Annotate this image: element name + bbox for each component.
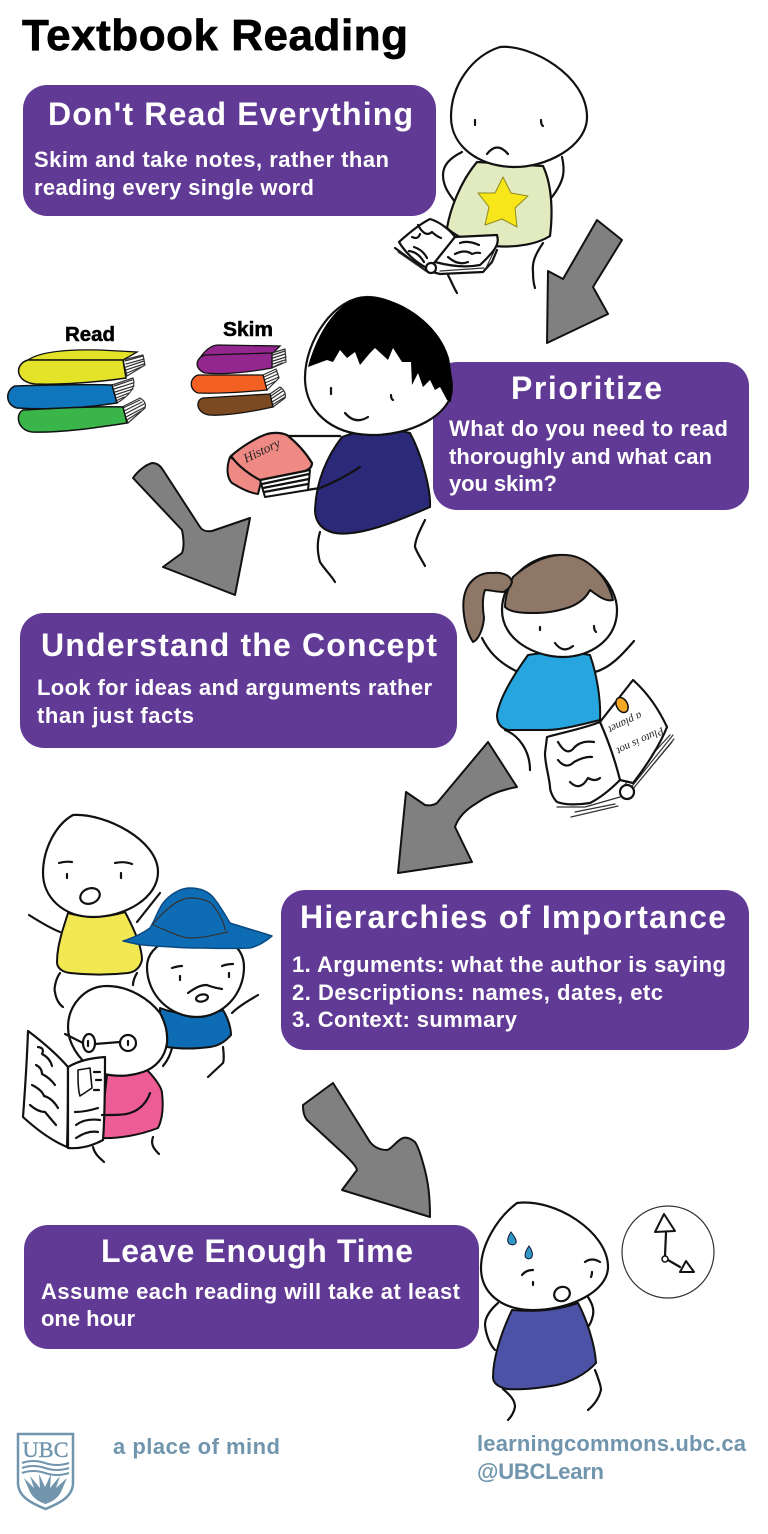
character: boy with black hair <box>228 297 452 582</box>
character: yellow shirt <box>29 815 160 1007</box>
heading: Hierarchies of Importance <box>300 899 726 935</box>
heading: Leave Enough Time <box>101 1233 413 1269</box>
website and handle: @UBCLearn <box>477 1459 604 1484</box>
tagline: a place of mind <box>113 1434 280 1459</box>
history book <box>228 433 312 497</box>
open book: Pluto is not <box>614 724 667 757</box>
book stack: skim <box>191 345 286 415</box>
group of three characters <box>23 815 272 1162</box>
panel: don't read everything <box>23 85 436 216</box>
open book: a planet <box>605 709 644 736</box>
heading: Prioritize <box>511 370 662 406</box>
list: 1. Arguments: what the author is saying <box>292 952 726 977</box>
open book <box>395 219 498 274</box>
head <box>481 1203 608 1310</box>
heading: Don't Read Everything <box>48 96 413 132</box>
panel: understand the concept <box>20 613 457 748</box>
label: skim: Skim <box>223 319 273 341</box>
website and handle <box>477 1431 747 1484</box>
list: 2. Descriptions: names, dates, etc <box>292 980 663 1005</box>
star <box>478 177 528 227</box>
text block: Look for ideas and arguments rather <box>37 675 432 700</box>
sweat drops <box>508 1232 532 1259</box>
list: 3. Context: summary <box>292 1007 518 1032</box>
character: blue hat <box>123 888 272 1077</box>
arrow <box>133 463 250 595</box>
text block <box>41 1279 461 1331</box>
head <box>451 47 587 167</box>
shirt <box>447 162 552 246</box>
text block <box>449 416 728 496</box>
text block: one hour <box>41 1306 135 1331</box>
head <box>305 297 452 435</box>
icon: clock <box>622 1206 714 1298</box>
open book <box>23 1031 105 1148</box>
list <box>292 952 726 1032</box>
history book: History <box>240 435 283 466</box>
text block: reading every single word <box>34 175 314 200</box>
hair <box>308 297 452 402</box>
open book <box>545 680 674 817</box>
character: worried with sweat drops <box>481 1203 608 1420</box>
character: pink shirt with glasses <box>23 986 167 1162</box>
text block: thoroughly and what can <box>449 444 712 469</box>
character: girl with ponytail and book <box>463 555 674 817</box>
text block: Assume each reading will take at least <box>41 1279 461 1304</box>
heading: Understand the Concept <box>41 627 437 663</box>
text block: What do you need to read <box>449 416 728 441</box>
shirt <box>315 430 430 534</box>
arrow <box>398 742 517 873</box>
head <box>502 555 617 657</box>
shirt <box>497 653 600 730</box>
panel: prioritize <box>433 362 749 510</box>
text block: Skim and take notes, rather than <box>34 147 389 172</box>
logo: UBC crest <box>18 1434 73 1509</box>
character: sad reader with star shirt <box>395 47 587 293</box>
panel: leave enough time <box>24 1225 479 1349</box>
text block: than just facts <box>37 703 194 728</box>
text block <box>34 147 389 200</box>
panel: hierarchies of importance <box>281 890 749 1050</box>
logo: UBC crest: UBC <box>22 1437 68 1462</box>
text block: you skim? <box>449 471 557 496</box>
title: Textbook Reading <box>22 11 408 60</box>
label: read: Read <box>65 324 115 346</box>
website and handle: learningcommons.ubc.ca <box>477 1431 747 1456</box>
hair <box>505 555 613 613</box>
text block <box>37 675 432 728</box>
arrow <box>303 1083 430 1217</box>
book stack: read <box>8 350 145 432</box>
arrow <box>547 220 622 343</box>
